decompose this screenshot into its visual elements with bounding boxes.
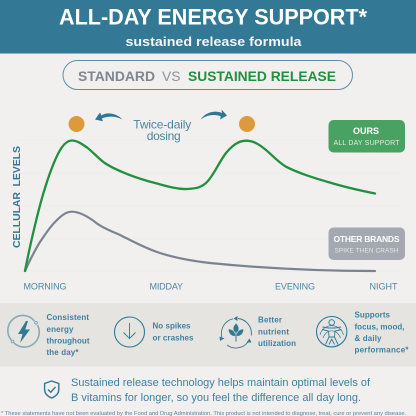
summary text bbox=[71, 377, 371, 404]
x axis labels: NIGHT bbox=[370, 282, 398, 292]
x axis labels bbox=[24, 282, 398, 292]
title: ALL-DAY ENERGY SUPPORT* bbox=[59, 4, 367, 30]
text bbox=[152, 322, 194, 342]
text bbox=[354, 310, 409, 354]
text: No spikes bbox=[152, 322, 191, 330]
chart bbox=[11, 140, 400, 292]
text: utilization bbox=[258, 339, 296, 348]
text: nutrient bbox=[258, 328, 289, 336]
text: performance* bbox=[354, 346, 409, 354]
dose marker: afternoon bbox=[239, 116, 255, 132]
subtitle: sustained release formula bbox=[126, 34, 302, 49]
text: focus, mood, bbox=[354, 322, 404, 332]
benefit: no spikes bbox=[114, 317, 194, 347]
badge title: OURS bbox=[353, 126, 379, 136]
x axis labels: MORNING bbox=[24, 282, 66, 292]
text: or crashes bbox=[152, 334, 194, 342]
text: Supports bbox=[354, 310, 391, 320]
icon: human figure bbox=[316, 316, 347, 347]
x axis labels: MIDDAY bbox=[150, 282, 183, 292]
benefit: nutrient utilization bbox=[220, 316, 296, 348]
badge: other brands bbox=[328, 228, 405, 260]
comparison pill bbox=[63, 60, 352, 90]
icon: leaves cycle bbox=[220, 316, 252, 348]
text: & daily bbox=[354, 334, 382, 343]
text: Better bbox=[258, 316, 282, 324]
icon: down arrow bbox=[114, 317, 144, 347]
summary text: Sustained release technology helps maintain optimal levels of bbox=[71, 377, 371, 389]
icon: lightning cycle bbox=[8, 315, 39, 347]
dosing label: Twice-daily bbox=[133, 117, 191, 131]
y axis label: CELLULAR LEVELS bbox=[11, 146, 23, 248]
pill label: sustained release: SUSTAINED RELEASE bbox=[188, 69, 336, 84]
text: the day* bbox=[46, 348, 79, 357]
text bbox=[46, 313, 90, 357]
badge subtitle: SPIKE THEN CRASH bbox=[334, 248, 399, 254]
line: sustained release, ours bbox=[25, 140, 375, 271]
text: throughout bbox=[46, 336, 90, 346]
badge title: OTHER BRANDS bbox=[334, 234, 400, 244]
pill label: vs: VS bbox=[162, 69, 180, 84]
summary text: B vitamins for longer, so you feel the difference all day long. bbox=[71, 392, 361, 404]
pill label: standard: STANDARD bbox=[78, 69, 155, 84]
badge subtitle: ALL DAY SUPPORT bbox=[334, 140, 400, 147]
x axis labels: EVENING bbox=[275, 282, 315, 292]
dose marker: morning bbox=[68, 116, 84, 132]
text: Consistent bbox=[46, 313, 89, 322]
badge: ours bbox=[328, 120, 405, 152]
dosing label bbox=[133, 117, 191, 143]
arrow: to morning dose bbox=[95, 112, 122, 121]
benefits panel bbox=[0, 303, 416, 366]
benefit: focus, mood bbox=[316, 310, 409, 354]
benefit: consistent energy bbox=[8, 313, 90, 357]
text: energy bbox=[46, 325, 74, 334]
line: standard, other brands bbox=[25, 212, 375, 271]
dosing label: dosing bbox=[147, 129, 181, 143]
header banner bbox=[0, 0, 416, 54]
arrow: to afternoon dose bbox=[200, 110, 227, 120]
icon: shield check bbox=[45, 381, 59, 398]
text bbox=[258, 316, 296, 348]
